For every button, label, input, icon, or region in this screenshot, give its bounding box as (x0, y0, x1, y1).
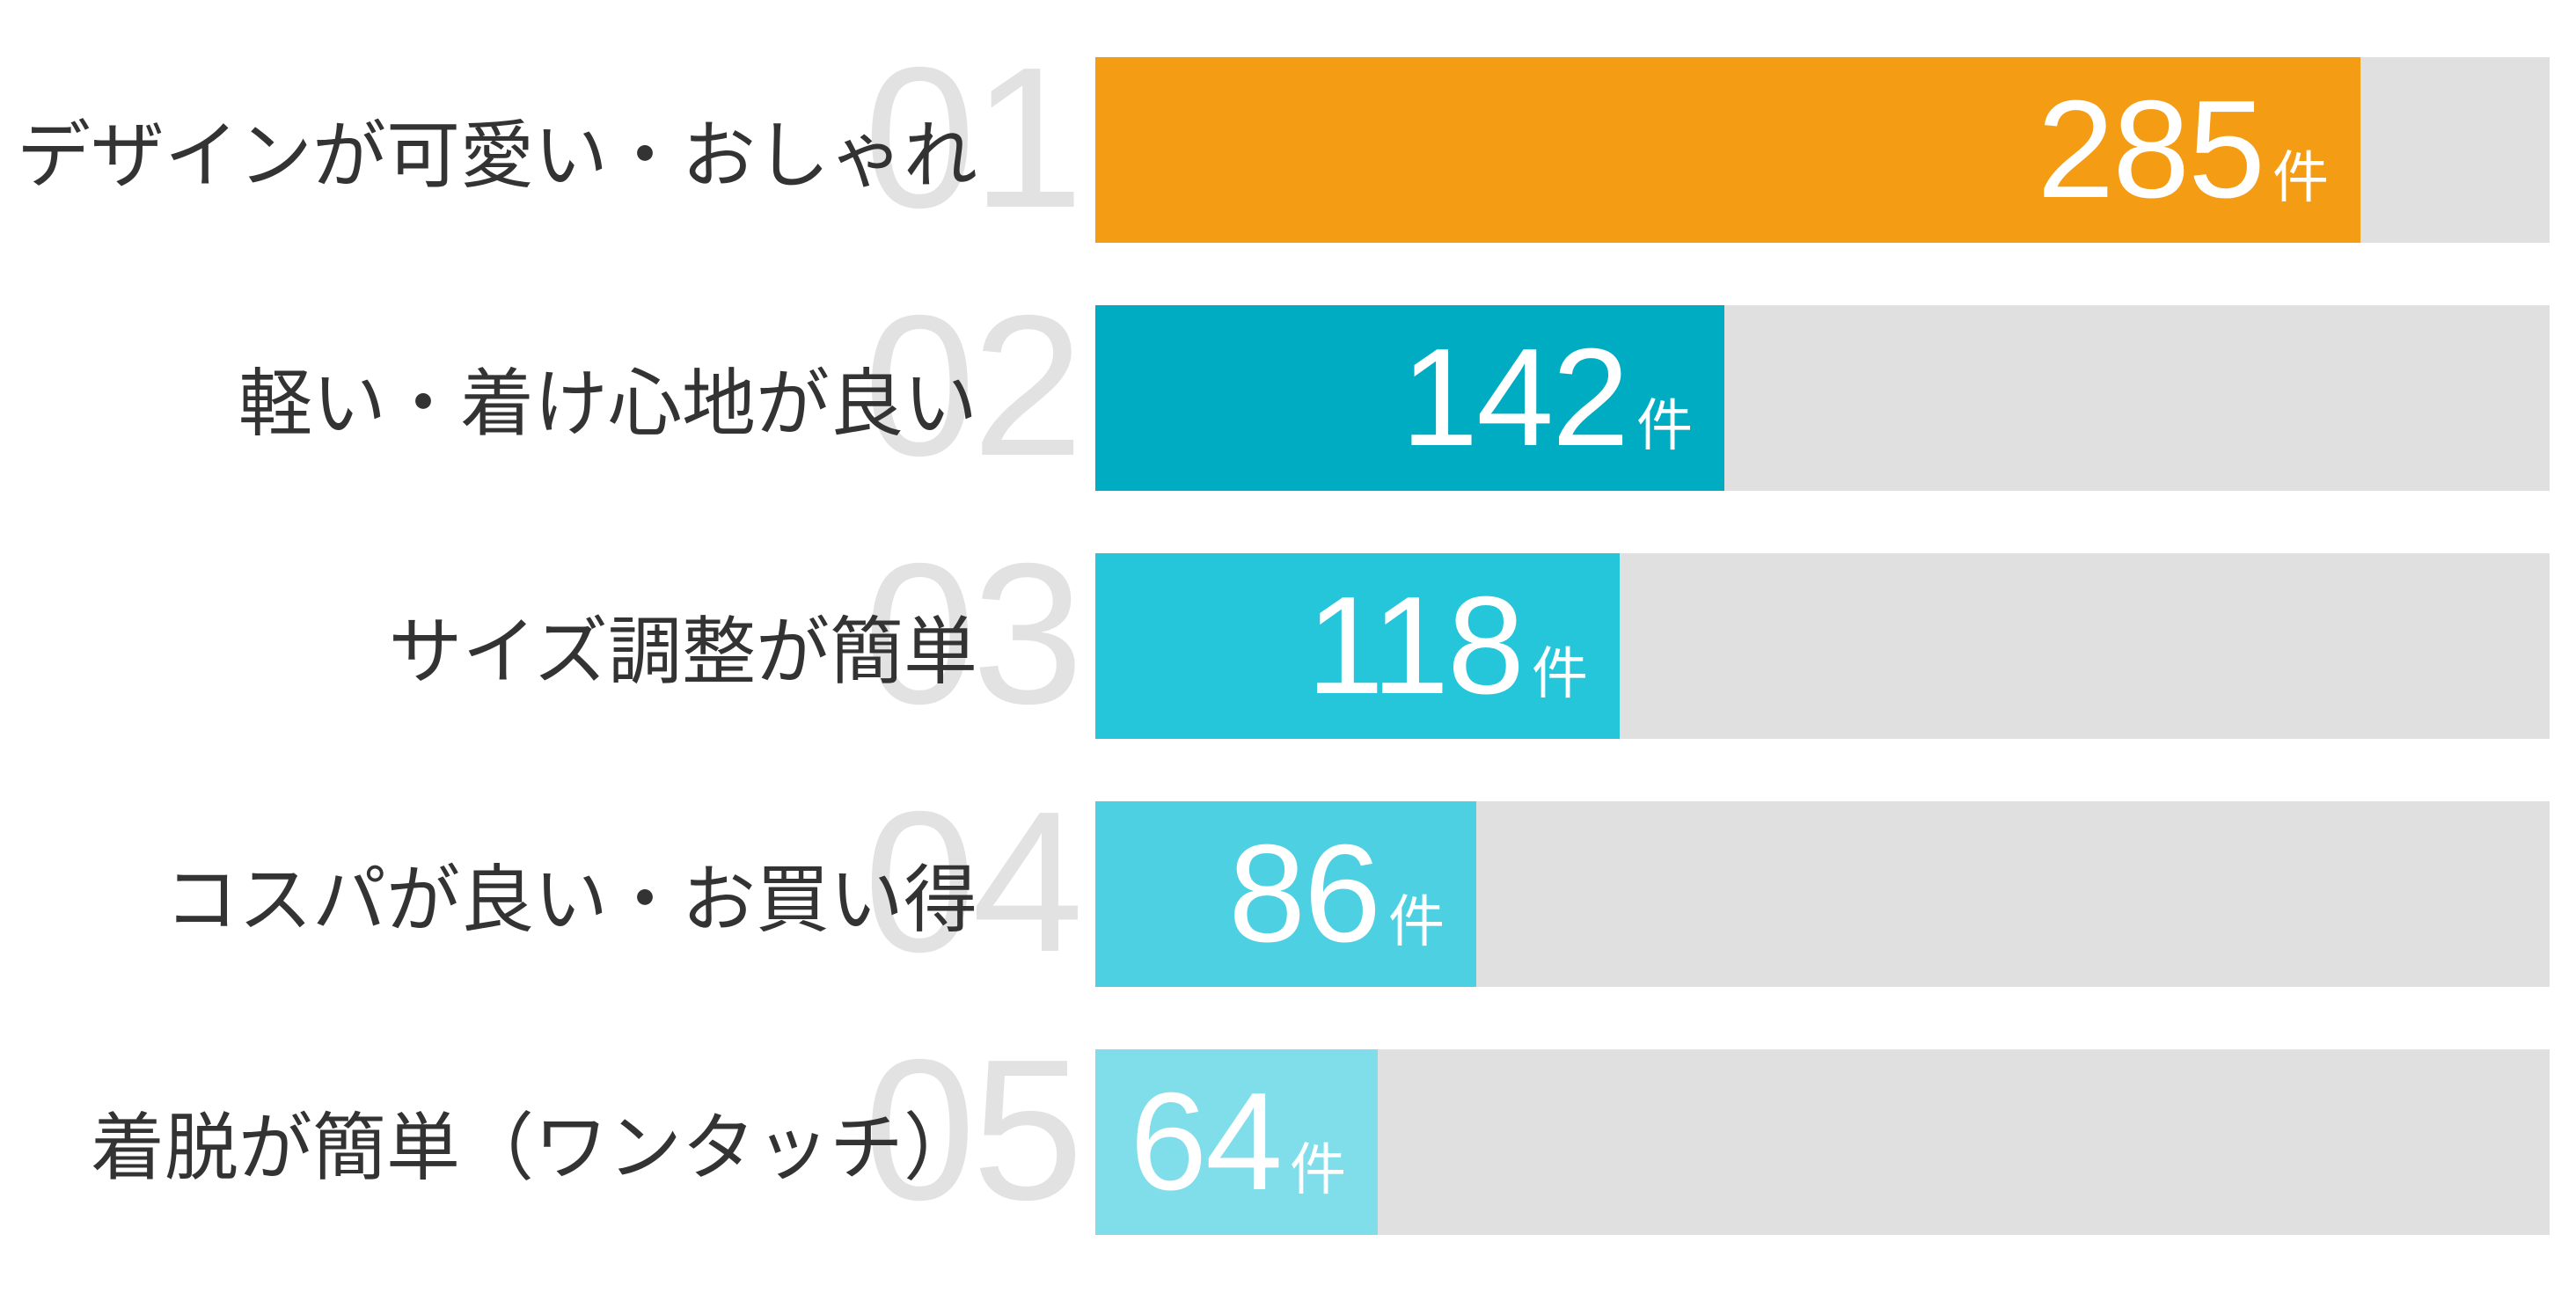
rank numeral 04: 04 (864, 771, 1080, 994)
rank numeral 02: 02 (864, 274, 1080, 498)
bar 2: 142 (1095, 305, 1724, 491)
bar 4: 86: 86 (1228, 816, 1379, 971)
bar 5: 64: 64 (1130, 1064, 1281, 1219)
rank numeral 05: 05 (864, 1019, 1080, 1242)
bar background 2 (1095, 305, 2550, 491)
row 1 (17, 26, 2550, 250)
label 1: デザインが可愛い・おしゃれ (17, 114, 977, 197)
bar 1: 285: 285 (2037, 72, 2264, 227)
bar 3: 118: 件 (1532, 629, 1588, 710)
bar 1: 285: 件 (2272, 133, 2329, 214)
bar background 1 (1095, 57, 2550, 243)
bar background 4 (1095, 801, 2550, 987)
label 2: 軽い・着け心地が良い (238, 362, 977, 445)
bar 3: 118 (1095, 553, 1620, 739)
label 4: コスパが良い・お買い得 (165, 858, 977, 941)
row 3 (389, 522, 2550, 746)
bar 1: 285 (1095, 57, 2360, 243)
rank numeral 01: 01 (864, 26, 1080, 250)
bar 2: 142: 142 (1401, 320, 1628, 475)
row 5 (91, 1019, 2550, 1242)
bar 4: 86: 件 (1388, 877, 1445, 958)
bar background 3 (1095, 553, 2550, 739)
bar 5: 64 (1095, 1049, 1378, 1235)
label 5: 着脱が簡単（ワンタッチ） (91, 1107, 977, 1189)
bar 3: 118: 118 (1306, 568, 1523, 723)
rank numeral 03: 03 (864, 522, 1080, 746)
label 3: サイズ調整が簡単 (389, 610, 977, 693)
row 2 (238, 274, 2550, 498)
row 4 (165, 771, 2550, 994)
bar 2: 142: 件 (1636, 381, 1693, 462)
bar 4: 86 (1095, 801, 1476, 987)
bar 5: 64: 件 (1290, 1125, 1346, 1206)
bar background 5 (1095, 1049, 2550, 1235)
